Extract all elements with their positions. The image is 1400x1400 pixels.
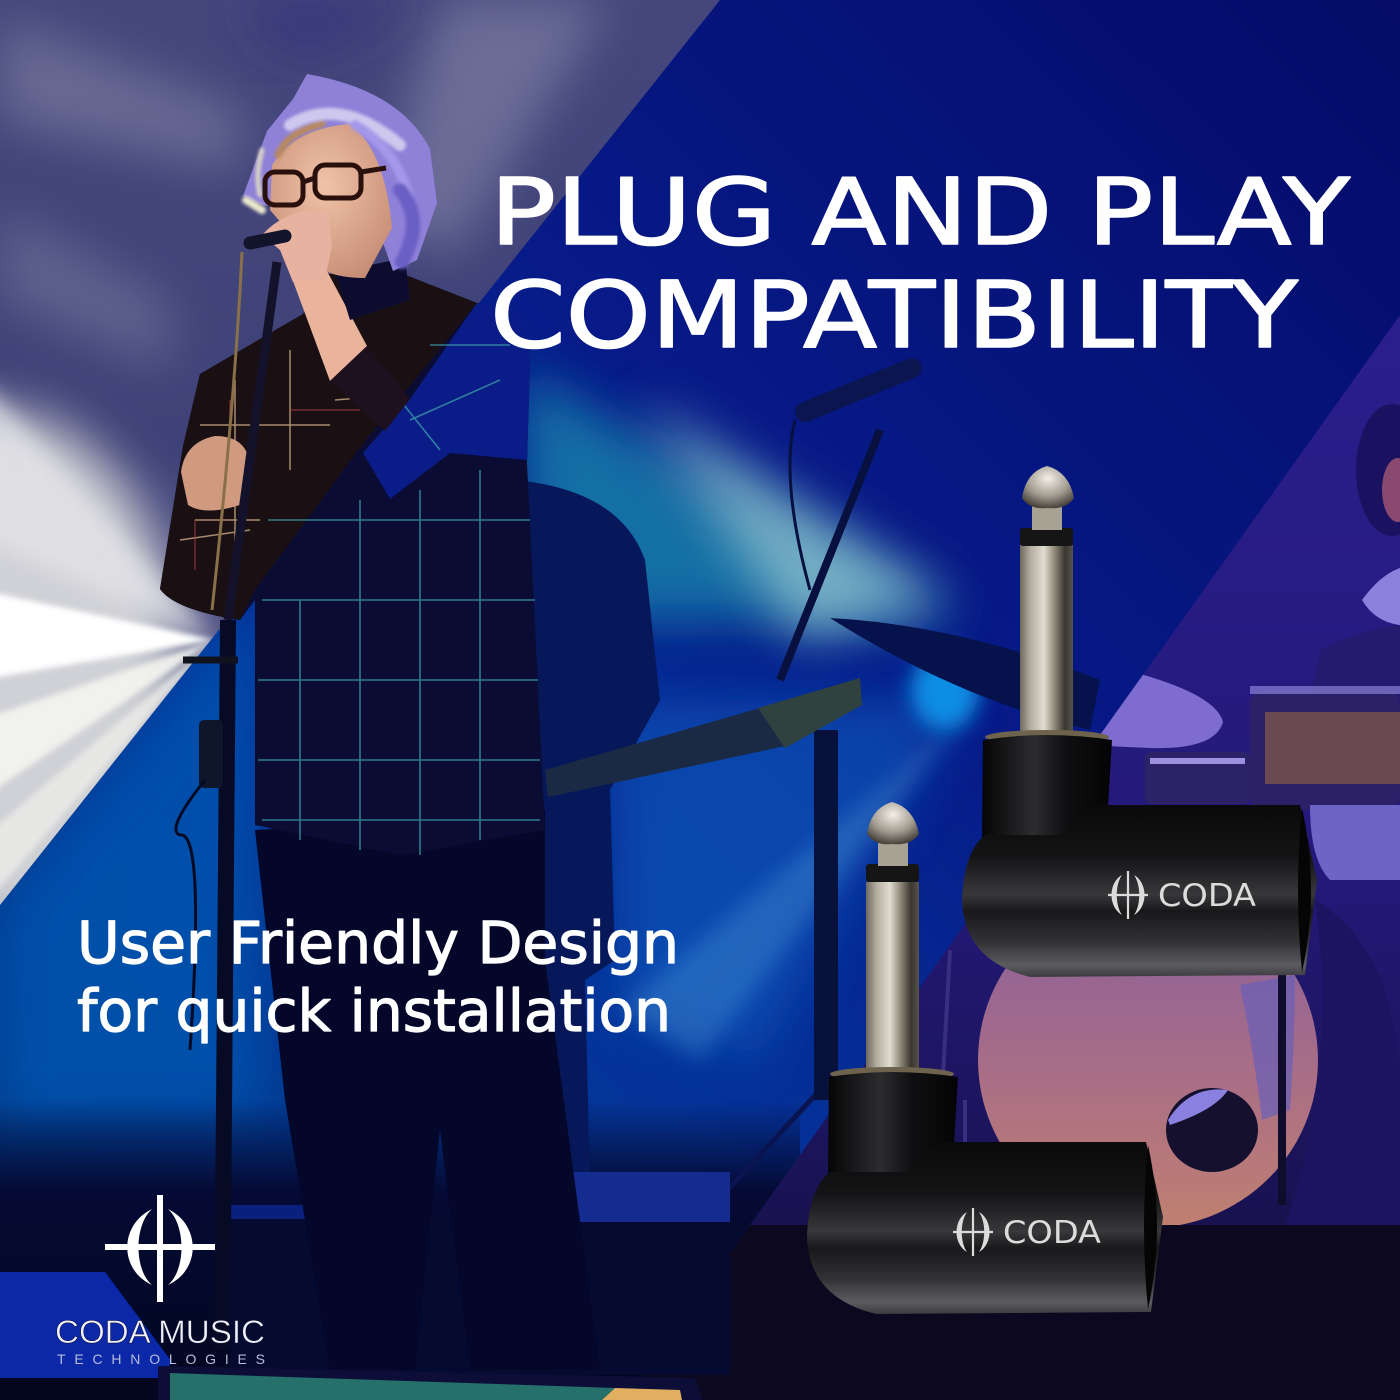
plug: front (807, 802, 1163, 1314)
bassist (470, 480, 660, 1200)
amp and floor (0, 1172, 730, 1400)
hair highlights (246, 114, 413, 262)
plug: rear (962, 466, 1317, 977)
brand tagline: TECHNOLOGIES (57, 1351, 265, 1367)
stage floor (620, 1225, 1400, 1400)
shirt plaid (258, 345, 540, 855)
cymbal (1101, 674, 1223, 748)
plug: rear: CODA (1158, 878, 1256, 914)
forearm (293, 271, 367, 381)
neck (335, 258, 410, 320)
amp top (158, 1366, 702, 1400)
raised sleeve (363, 303, 530, 499)
brand name: CODA MUSIC (55, 1314, 265, 1350)
shirt upper left dark panel (160, 274, 477, 620)
singer (160, 74, 600, 1370)
subtitle (77, 909, 679, 1045)
mic stand and bassist gear (470, 368, 1100, 1220)
cuff (330, 346, 410, 431)
drummer (1310, 404, 1400, 700)
title: PLUG AND PLAY (490, 159, 1351, 266)
subtitle: User Friendly Design (77, 909, 679, 977)
microphone (250, 236, 285, 243)
hair back (243, 74, 437, 271)
shirt (160, 274, 545, 855)
face (270, 124, 392, 278)
title line 2: COMPATIBILITY (490, 262, 1299, 369)
icon: crosshair logo (105, 1195, 215, 1302)
drum kit (940, 686, 1400, 1240)
background: drummer panel (620, 315, 1400, 1400)
floor monitor (0, 1272, 172, 1378)
singer mic stand (176, 252, 277, 1350)
hand on mic (262, 211, 332, 282)
background: left light-beam panel (0, 0, 720, 930)
brand logo (55, 1195, 265, 1367)
subtitle: for quick installation (77, 977, 671, 1045)
plug: front: CODA (1003, 1215, 1101, 1251)
legs (255, 810, 600, 1370)
left hand (181, 436, 250, 510)
glasses (265, 165, 386, 205)
